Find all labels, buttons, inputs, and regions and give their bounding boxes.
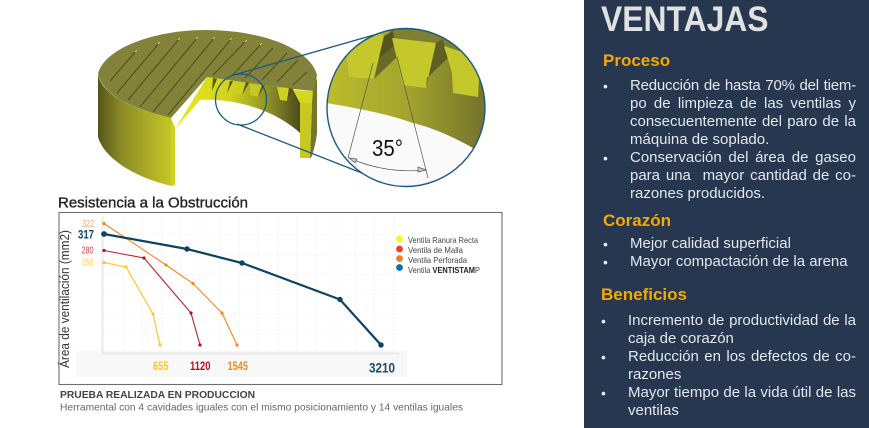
right cut wall: [300, 103, 312, 158]
list: proceso: consecuentemente del paro de la: [630, 112, 856, 130]
legend: Ventila VENTISTAMP: [408, 265, 480, 275]
x value labels: 1545: [228, 361, 248, 373]
y axis label: Área de ventilación (mm2): [57, 230, 72, 368]
heading: beneficios: Beneficios: [601, 285, 687, 304]
legend: Ventila de Malla: [408, 245, 463, 255]
illustration: 3D vent part: [98, 30, 317, 186]
footer note heading: PRUEBA REALIZADA EN PRODUCCION: [60, 390, 255, 401]
list: proceso: razones producidos.: [630, 184, 765, 202]
list: beneficios: razones: [628, 366, 681, 382]
list: proceso: [603, 76, 856, 202]
list: proceso: •: [603, 78, 608, 94]
list: corazon: Mejor calidad superficial: [630, 234, 791, 252]
list: beneficios: Incremento de productividad de la: [628, 312, 856, 328]
slot tips: [135, 37, 262, 52]
y value labels: 258: [82, 258, 94, 268]
list: proceso: Conservación del área de gaseo: [630, 148, 856, 166]
list: proceso: po de limpieza de las ventilas y: [630, 94, 856, 112]
top olive strip: [389, 29, 453, 48]
right outer wall: [310, 78, 317, 158]
list: proceso: •: [603, 150, 608, 166]
list: corazon: •: [603, 236, 608, 252]
x value labels: [153, 360, 395, 376]
series: ventila ranura recta: [102, 261, 162, 347]
outer wall: [98, 75, 175, 186]
heading: proceso: Proceso: [603, 51, 670, 70]
footer note text: Herramental con 4 cavidades iguales con el mismo posicionamiento y 14 ventilas iguales: [60, 402, 463, 414]
x value labels: 1120: [190, 361, 210, 373]
list: corazon: Mayor compactación de la arena: [630, 252, 848, 270]
inner wall: [175, 77, 300, 133]
tooth right: [444, 46, 480, 97]
chart: resistance to obstruction: [57, 212, 502, 384]
angle lines: [348, 57, 428, 178]
top face: [98, 30, 317, 118]
vent teeth: [277, 87, 289, 101]
tooth center: [392, 38, 436, 88]
list: beneficios: caja de corazón: [628, 330, 734, 346]
list: beneficios: ventilas: [628, 402, 679, 418]
y value labels: 322: [82, 219, 94, 230]
tooth left: [347, 34, 384, 79]
chart title: Resistencia a la Obstrucción: [58, 196, 248, 212]
list: beneficios: •: [601, 384, 606, 400]
list: proceso: Reducción de hasta 70% del tiem-: [630, 76, 856, 94]
graphics layer: part illustration and chart: [58, 28, 503, 412]
panel title: VENTAJAS: [601, 0, 769, 39]
x value labels: 655: [153, 361, 169, 373]
series: ventila ventistamp: [101, 231, 384, 348]
series: ventila perforada: [102, 222, 239, 347]
legend: Ventila Ranura Recta: [408, 235, 478, 245]
heading: corazon: Corazón: [603, 211, 671, 230]
legend: [396, 235, 480, 275]
x value labels: 3210: [369, 360, 395, 376]
y value labels: 280: [82, 246, 94, 256]
detail lens: [326, 28, 486, 188]
legend: Ventila Perforada: [408, 255, 467, 265]
angle label: 35°: [372, 135, 403, 161]
list: corazon: [603, 234, 848, 270]
slot left: [374, 31, 397, 79]
list: beneficios: Mayor tiempo de la vida útil de las: [628, 384, 856, 400]
list: beneficios: Reducción en los defectos de co-: [628, 348, 856, 364]
magnifier circle and connector lines: [216, 31, 388, 175]
panel: ventajas: [584, 0, 869, 428]
list: beneficios: [601, 312, 856, 418]
list: beneficios: •: [601, 312, 606, 328]
list: beneficios: •: [601, 348, 606, 364]
list: proceso: máquina de soplado.: [630, 130, 769, 148]
list: proceso: para una mayor cantidad de co-: [630, 166, 856, 184]
y value labels: 317: [78, 230, 94, 242]
vent slots: [110, 37, 307, 115]
list: corazon: •: [603, 254, 608, 270]
slot shadows: [212, 78, 293, 101]
slot right: [426, 39, 448, 88]
band: [328, 31, 484, 148]
y value labels: [78, 219, 94, 268]
series: ventila de malla: [102, 249, 202, 347]
cut face: [171, 118, 175, 186]
